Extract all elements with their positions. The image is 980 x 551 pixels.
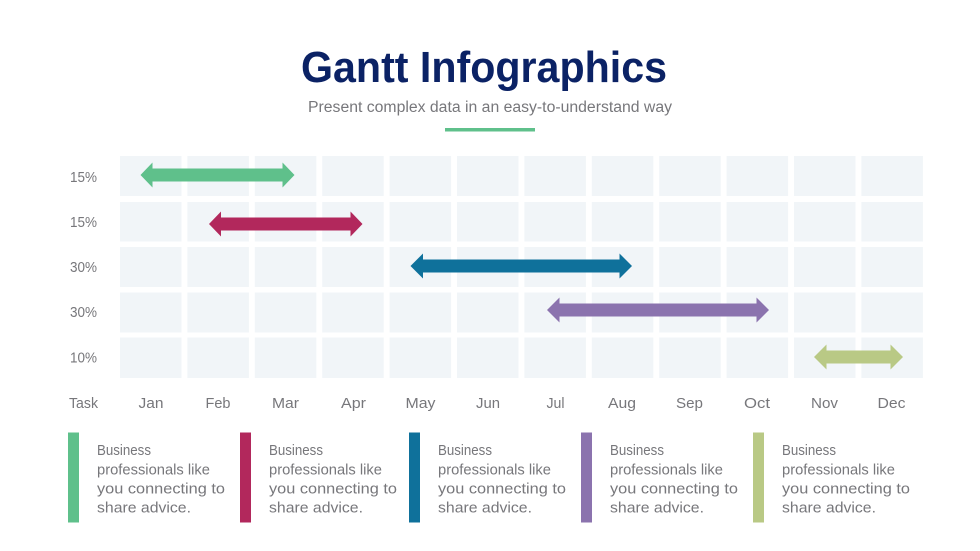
month axis labels: Jul: [546, 396, 564, 412]
row percentage labels: 10%: [70, 350, 97, 366]
arrow: task 2 Feb to Apr: [209, 212, 362, 236]
legend item 4: Business: [610, 443, 664, 459]
month axis labels: Feb: [206, 396, 230, 412]
row percentage labels: 30%: [70, 305, 97, 321]
legend item 2: you connecting to: [269, 482, 397, 498]
arrow: task 3 May to Aug: [410, 254, 632, 278]
month axis labels: Jan: [138, 396, 164, 412]
legend item 3: share advice.: [438, 501, 532, 517]
month axis labels: Oct: [744, 396, 770, 412]
title: Gantt Infographics: [301, 43, 667, 92]
legend item 4: share advice.: [610, 501, 704, 517]
legend item 2: [240, 432, 397, 522]
month axis labels: Dec: [878, 396, 906, 412]
month axis labels: [69, 396, 906, 412]
arrow: task 5 Nov to Dec: [814, 344, 903, 370]
legend item 1: [68, 432, 225, 522]
legend item 5: share advice.: [782, 501, 876, 517]
arrow: task 1 Jan to Mar: [140, 162, 294, 188]
title underline: [445, 128, 535, 132]
legend item 3: professionals like: [438, 462, 551, 478]
legend item 3: Business: [438, 443, 492, 459]
legend item 1: you connecting to: [97, 482, 225, 498]
legend item 4: you connecting to: [610, 482, 738, 498]
row percentage labels: 15%: [70, 215, 97, 231]
month axis labels: Task: [69, 396, 99, 412]
month axis labels: Sep: [676, 396, 703, 412]
legend item 4: [581, 432, 738, 522]
arrow: task 4 Jul to Oct: [547, 298, 769, 322]
legend item 2: Business: [269, 443, 323, 459]
legend item 1: share advice.: [97, 501, 191, 517]
month axis labels: Mar: [272, 396, 299, 412]
legend item 5: you connecting to: [782, 482, 910, 498]
legend item 5: professionals like: [782, 462, 895, 478]
month axis labels: Jun: [476, 396, 500, 412]
month axis labels: Aug: [608, 396, 636, 412]
row percentage labels: 15%: [70, 170, 97, 186]
legend item 2: professionals like: [269, 462, 382, 478]
legend item 5: [753, 432, 910, 522]
legend item 2: share advice.: [269, 501, 363, 517]
month axis labels: Apr: [341, 396, 366, 412]
row percentage labels: [70, 170, 97, 366]
legend item 3: [409, 432, 566, 522]
legend item 1: Business: [97, 443, 151, 459]
gantt grid: [120, 156, 923, 378]
subtitle: Present complex data in an easy-to-understand way: [308, 99, 672, 116]
legend item 4: professionals like: [610, 462, 723, 478]
month axis labels: May: [406, 396, 436, 412]
legend item 5: Business: [782, 443, 836, 459]
row percentage labels: 30%: [70, 260, 97, 276]
legend item 1: professionals like: [97, 462, 210, 478]
legend item 3: you connecting to: [438, 482, 566, 498]
month axis labels: Nov: [811, 396, 839, 412]
